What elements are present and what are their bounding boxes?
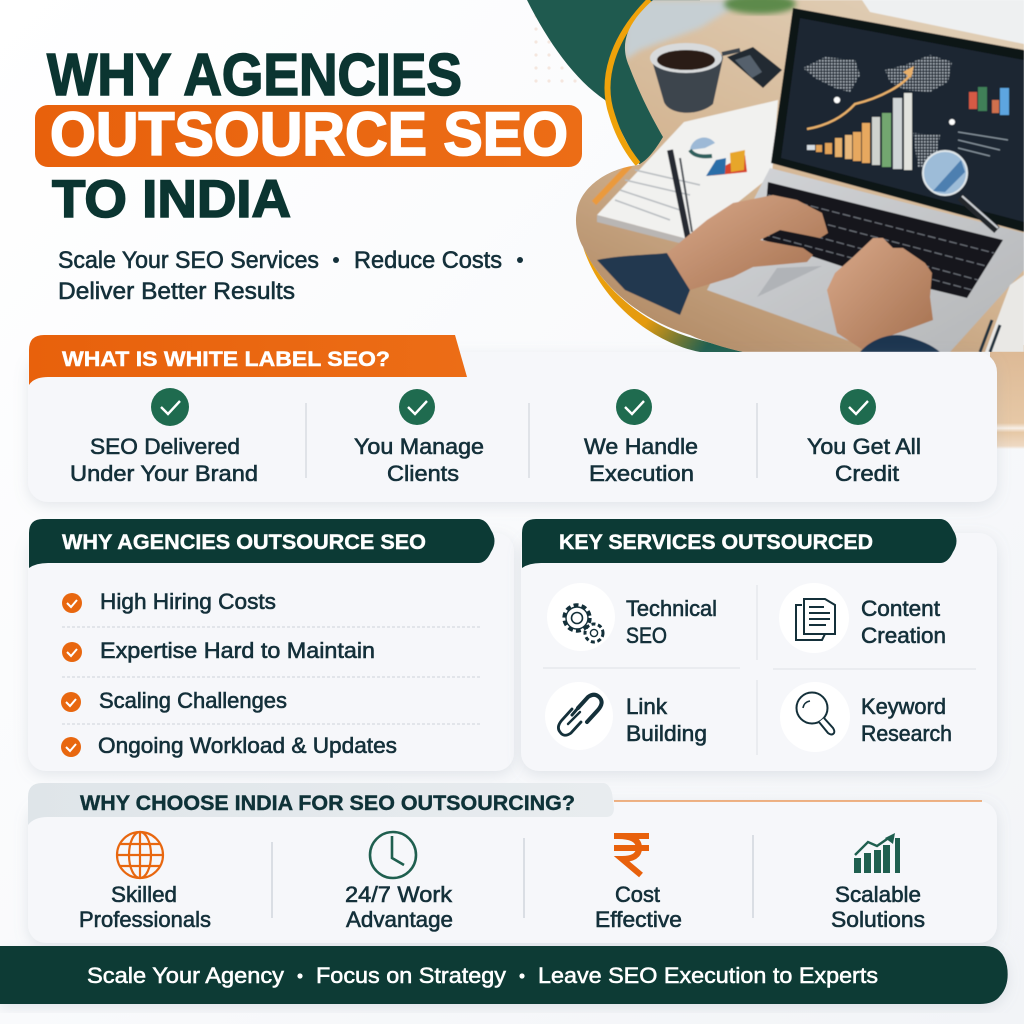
title line 3: TO INDIA [52,170,291,229]
item: 24/7 work advantage: Advantage [346,907,453,932]
item: cost effective: Effective [595,907,682,932]
item: 24/7 work advantage [345,832,453,932]
right sleeve [860,335,940,352]
desk surface [570,0,1024,352]
laptop screen [771,8,1024,232]
item: scalable solutions: Solutions [831,907,925,932]
service: technical seo: SEO [626,623,667,648]
heading tab [29,519,494,568]
laptop base [707,168,1024,352]
bullet: ongoing workload: Ongoing Workload & Updates [98,733,397,758]
card [521,533,997,771]
coffee cup [650,43,740,113]
subtitle: Scale Your SEO Services [58,247,319,274]
footer banner: Focus on Strategy [316,963,506,988]
icon: magnifier [796,692,834,734]
item: seo delivered [70,388,258,486]
card [28,533,514,771]
heading tab [29,335,467,385]
icon: growth chart [854,833,900,873]
panel: key services outsourced [521,519,997,771]
icon: rupee [614,836,649,875]
left sleeve [597,253,690,315]
heading text: WHAT IS WHITE LABEL SEO? [62,348,390,371]
service: content creation: Creation [861,623,946,648]
item: skilled professionals [79,832,211,932]
bullet: scaling challenges: Scaling Challenges [99,688,287,713]
item: skilled professionals: Professionals [79,907,211,932]
item: cost effective: Cost [615,882,660,907]
bar chart on screen [807,93,912,170]
service: keyword research: Keyword [861,694,946,719]
panel: why choose india [28,783,997,943]
panel: why agencies outsource seo [28,519,514,771]
heading text: WHY AGENCIES OUTSOURCE SEO [62,531,426,554]
item: we handle execution: Execution [589,461,694,486]
service: content creation: Content [861,596,940,621]
service: link building: Link [626,694,668,719]
item: skilled professionals: Skilled [111,882,177,907]
item: scalable solutions: Scalable [835,882,921,907]
card [28,352,997,502]
title [35,42,582,229]
service: keyword research [780,682,952,752]
item: you manage clients: Clients [387,461,459,486]
item: you get all credit [807,389,921,486]
growth arrow on screen [807,72,912,129]
left hand [667,195,828,290]
subtitle: Deliver Better Results [58,278,295,305]
mini bars on screen [969,87,1009,115]
item: you manage clients [354,389,484,486]
world map [803,57,860,92]
icon: clock [370,832,416,878]
item: seo delivered: Under Your Brand [70,461,258,486]
trackpad [757,266,822,297]
heading tab [28,783,614,825]
heading text: WHY CHOOSE INDIA FOR SEO OUTSOURCING? [80,792,575,815]
blurred office background [625,0,731,60]
right hand [827,238,933,350]
item: you get all credit: Credit [835,461,899,486]
plant [724,0,796,14]
card [28,801,997,943]
panel: what is white label seo [28,335,997,502]
orange heading rule [614,800,982,802]
magnifying glass [923,151,998,230]
icon: globe [117,832,163,878]
subtitle: Reduce Costs [354,247,502,274]
desk stationery on the right [985,275,1024,352]
item: scalable solutions [831,833,925,932]
item: you manage clients: You Manage [354,434,484,459]
hero photo: laptop on a desk [570,0,1024,352]
footer banner [0,946,1008,1004]
service: content creation [779,583,946,653]
item: cost effective [595,836,682,932]
icon: documents [796,599,835,640]
title line 1: WHY AGENCIES [47,42,462,108]
service: link building [545,682,707,750]
item: 24/7 work advantage: 24/7 Work [345,882,453,907]
bullet: expertise hard to maintain: Expertise Hard to Maintain [100,638,375,663]
phone [727,47,782,88]
item: you get all credit: You Get All [807,434,921,459]
footer banner: Leave SEO Execution to Experts [538,963,878,988]
heading tab [522,519,956,568]
item: we handle execution: We Handle [584,434,698,459]
service: technical seo [547,583,717,651]
service: technical seo: Technical [626,596,717,621]
footer banner: Scale Your Agency [87,963,284,988]
heading text: KEY SERVICES OUTSOURCED [559,531,873,554]
notebook with report [594,100,778,246]
bullet: high hiring costs: High Hiring Costs [100,589,276,614]
title highlight bar [35,105,582,167]
title line 2: OUTSOURCE SEO [50,100,568,168]
item: seo delivered: SEO Delivered [90,434,240,459]
item: we handle execution [584,389,698,486]
subtitle [58,247,523,305]
icon: chain link [558,695,602,735]
service: link building: Building [626,721,707,746]
icon: gears [564,605,603,642]
decorative green and orange swoosh [525,0,1024,449]
keyboard [762,182,1003,298]
paper on the desk, top right [862,0,1024,44]
service: keyword research: Research [861,721,952,746]
